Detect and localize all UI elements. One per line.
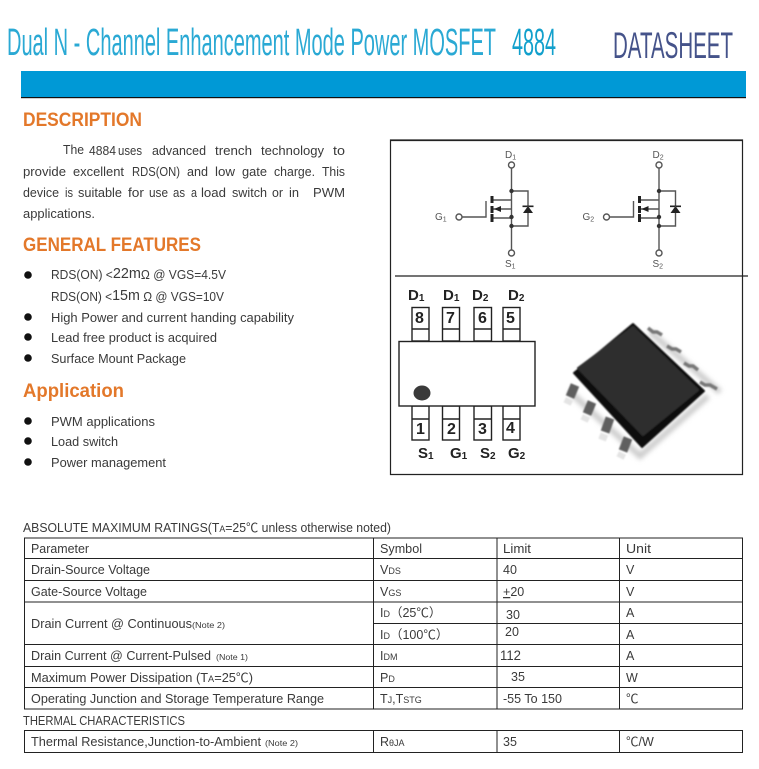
schematic: MOSFET 2: 2 bbox=[590, 216, 594, 224]
text block: description: provide bbox=[23, 165, 66, 179]
row: drain-source voltage: 40 bbox=[503, 563, 517, 577]
pinout diagram: 2 bbox=[483, 293, 489, 304]
text block: description: or bbox=[272, 186, 283, 200]
row: operating temperature: TJ,TSTG bbox=[380, 692, 422, 706]
schematic: MOSFET 1: 1 bbox=[512, 264, 516, 270]
pinout diagram: 1 bbox=[416, 421, 425, 438]
text block: description: load bbox=[201, 186, 226, 200]
list: general features: High Power and current handing capability bbox=[51, 311, 295, 325]
text block: description: trench bbox=[215, 144, 252, 158]
text block: description: switch bbox=[232, 186, 267, 200]
text block: description: for bbox=[128, 186, 144, 200]
row: header: Parameter bbox=[31, 542, 89, 556]
row: drain-source voltage: V bbox=[626, 563, 635, 577]
row: operating temperature: Operating Junction and Storage Temperature Range bbox=[31, 692, 324, 706]
pinout diagram: D bbox=[472, 287, 483, 304]
pinout diagram: D bbox=[508, 287, 519, 304]
text block: description: technology bbox=[261, 144, 325, 158]
text block: description: applications. bbox=[23, 207, 95, 221]
pinout diagram: S bbox=[418, 445, 428, 462]
row: gate-source voltage bbox=[31, 585, 635, 599]
text block: description: in bbox=[289, 186, 299, 200]
heading: general features: GENERAL FEATURES bbox=[23, 235, 201, 256]
schematic: MOSFET 2: S bbox=[652, 259, 659, 270]
pinout diagram: D bbox=[408, 287, 419, 304]
row: operating temperature: -55 To 150 bbox=[503, 692, 562, 706]
pinout diagram: 3 bbox=[478, 421, 487, 438]
pinout diagram: 1 bbox=[454, 293, 460, 304]
heading: absolute maximum ratings: ABSOLUTE MAXIMUM RATINGS(TA=25℃ unless otherwise noted) bbox=[23, 521, 391, 535]
row: drain current pulsed bbox=[31, 647, 635, 663]
pinout diagram bbox=[399, 287, 535, 462]
schematic: MOSFET 1: 1 bbox=[512, 154, 516, 162]
pinout diagram: 1 bbox=[428, 451, 434, 462]
row: gate-source voltage: V bbox=[626, 585, 635, 599]
schematic: MOSFET 2: 2 bbox=[659, 264, 663, 270]
row: power dissipation: W bbox=[626, 671, 638, 685]
row: gate-source voltage: Gate-Source Voltage bbox=[31, 585, 147, 599]
row: drain current continuous bbox=[31, 606, 635, 642]
text block: description: RDS(ON) bbox=[132, 165, 180, 179]
list: general features: Ω @ VGS=10V bbox=[140, 290, 225, 304]
row: drain-source voltage bbox=[31, 563, 635, 577]
list: general features bbox=[24, 265, 295, 366]
schematic: MOSFET 2: G bbox=[582, 212, 590, 223]
text block: description: This bbox=[322, 165, 345, 179]
row: power dissipation: PD bbox=[380, 671, 395, 685]
schematic: MOSFET 2: D bbox=[652, 150, 660, 161]
schematic: MOSFET 1: G bbox=[435, 212, 443, 223]
row: header: Unit bbox=[626, 542, 652, 556]
row: drain current pulsed: IDM bbox=[380, 649, 397, 663]
list: general features: 22m bbox=[113, 265, 141, 282]
pinout diagram: G bbox=[450, 445, 462, 462]
row: power dissipation: 35 bbox=[511, 670, 525, 684]
table: thermal characteristics bbox=[24, 730, 742, 752]
row: drain current continuous: A bbox=[626, 606, 635, 620]
table: thermal characteristics: (Note 2) bbox=[265, 738, 298, 748]
pinout diagram: 1 bbox=[419, 293, 425, 304]
list: application: PWM applications bbox=[51, 415, 155, 429]
pinout diagram: 1 bbox=[462, 451, 468, 462]
text block: description: 4884 bbox=[89, 144, 116, 158]
text block: description: device bbox=[23, 186, 59, 200]
pinout diagram: S bbox=[480, 445, 490, 462]
text block: description: excellent bbox=[73, 165, 125, 179]
heading: application: Application bbox=[23, 381, 124, 402]
list: general features: RDS(ON) < bbox=[51, 290, 112, 304]
table: thermal characteristics: 35 bbox=[503, 735, 517, 749]
schematic: MOSFET 1: S bbox=[505, 259, 512, 270]
row: drain current pulsed: Drain Current @ Current-Pulsed bbox=[31, 649, 211, 663]
row: drain current continuous: 20 bbox=[505, 625, 519, 639]
pinout diagram: D bbox=[443, 287, 454, 304]
row: gate-source voltage: VGS bbox=[380, 585, 401, 599]
list: general features: RDS(ON) < bbox=[51, 268, 113, 282]
text block: description bbox=[23, 143, 345, 221]
list: general features: 15m bbox=[112, 287, 140, 304]
row: power dissipation: Maximum Power Dissipation (T A=25℃) bbox=[31, 671, 253, 685]
text block: description: suitable bbox=[78, 186, 122, 200]
row: gate-source voltage: +20 bbox=[503, 585, 524, 599]
schematic: MOSFET 2 bbox=[582, 150, 681, 270]
table: absolute maximum ratings bbox=[24, 538, 742, 709]
pinout diagram: G bbox=[508, 445, 520, 462]
table: thermal characteristics: ℃/W bbox=[626, 735, 654, 749]
text block: description: The bbox=[63, 143, 84, 157]
pinout diagram: 6 bbox=[478, 310, 487, 327]
row: drain current pulsed: (Note 1) bbox=[216, 652, 248, 662]
list: general features: Ω @ VGS=4.5V bbox=[141, 268, 227, 282]
row: drain current continuous: 30 bbox=[506, 608, 520, 622]
row: header: Symbol bbox=[380, 542, 422, 556]
pinout diagram: 2 bbox=[490, 451, 496, 462]
row: drain current continuous: ID（100℃） bbox=[380, 628, 448, 642]
list: general features: Surface Mount Package bbox=[51, 352, 186, 366]
text block: description: as bbox=[173, 186, 185, 200]
row: drain current pulsed: A bbox=[626, 649, 635, 663]
panel: device diagrams frame bbox=[390, 140, 748, 474]
row: drain current continuous: Drain Current @ Continuous bbox=[31, 617, 192, 631]
row: drain current continuous: ID（25℃） bbox=[380, 606, 441, 620]
row: drain current pulsed: 112 bbox=[500, 647, 521, 663]
text block: description: use bbox=[149, 186, 168, 200]
text block: description: and bbox=[187, 165, 208, 179]
text block: description: gate bbox=[242, 165, 267, 179]
text block: description: charge. bbox=[274, 165, 315, 179]
row: drain-source voltage: VDS bbox=[380, 563, 401, 577]
row: drain-source voltage: Drain-Source Voltage bbox=[31, 563, 150, 577]
text block: description: a bbox=[191, 186, 197, 200]
schematic: MOSFET 2: 2 bbox=[660, 154, 664, 162]
part number: 4884 bbox=[512, 22, 556, 64]
pinout diagram: 2 bbox=[520, 451, 526, 462]
row: drain current continuous: (Note 2) bbox=[192, 620, 225, 630]
pinout diagram: 5 bbox=[506, 310, 515, 327]
schematic: MOSFET 1 bbox=[435, 150, 534, 270]
text block: description: PWM bbox=[313, 186, 345, 200]
heading: description: DESCRIPTION bbox=[23, 110, 142, 131]
row: operating temperature bbox=[31, 692, 639, 706]
list: application: Load switch bbox=[51, 435, 118, 449]
text block: description: advanced bbox=[152, 144, 206, 158]
pinout diagram: 2 bbox=[447, 421, 456, 438]
row: header: Limit bbox=[503, 542, 532, 556]
pinout diagram: 4 bbox=[506, 420, 515, 437]
row: header bbox=[31, 542, 652, 556]
table: thermal characteristics: Thermal Resistance,Junction-to-Ambient bbox=[31, 735, 262, 749]
row: power dissipation bbox=[31, 670, 638, 685]
pinout diagram: 8 bbox=[415, 310, 424, 327]
heading: thermal characteristics: THERMAL CHARACTERISTICS bbox=[23, 714, 185, 728]
table: thermal characteristics: RθJA bbox=[380, 735, 405, 749]
list: application bbox=[24, 415, 167, 470]
pinout diagram: 2 bbox=[519, 293, 525, 304]
text block: description: low bbox=[215, 165, 236, 179]
list: general features: Lead free product is acquired bbox=[51, 331, 217, 345]
schematic: MOSFET 1: D bbox=[505, 150, 512, 161]
text block: description: is bbox=[65, 186, 73, 200]
header bar bbox=[21, 71, 746, 98]
text block: description: uses bbox=[118, 144, 142, 158]
list: application: Power management bbox=[51, 456, 167, 470]
text block: description: to bbox=[333, 144, 345, 158]
row: operating temperature: ℃ bbox=[626, 692, 639, 706]
chip photo bbox=[567, 324, 720, 458]
row: drain current continuous: A bbox=[626, 628, 635, 642]
pinout diagram: 7 bbox=[446, 310, 455, 327]
schematic: MOSFET 1: 1 bbox=[443, 216, 447, 224]
